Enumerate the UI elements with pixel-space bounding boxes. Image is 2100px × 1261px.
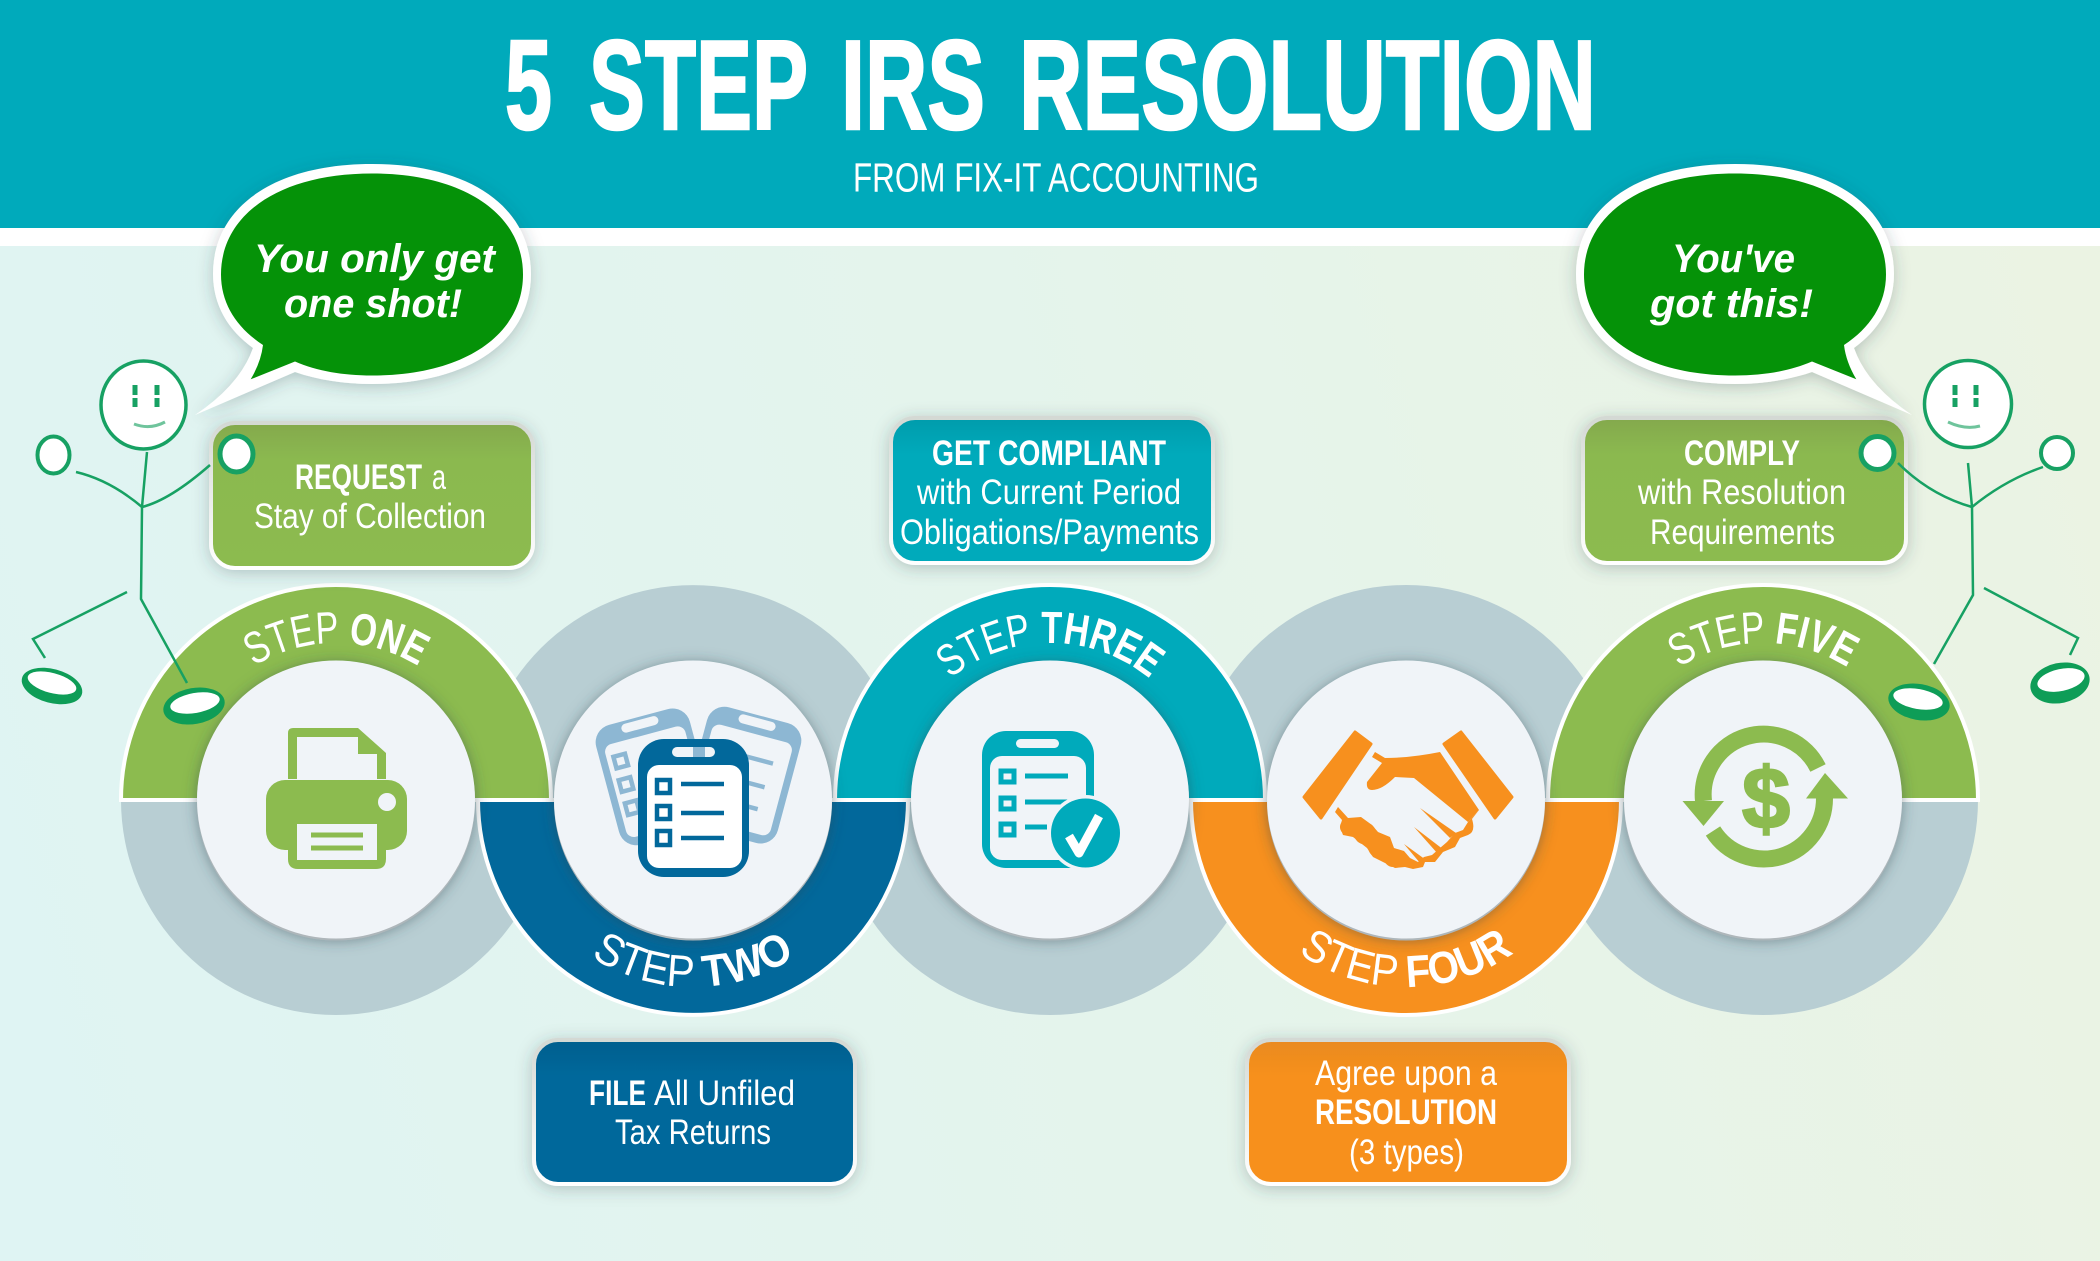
icon: clipboard with check [982, 731, 1124, 871]
text: file all unfiled tax returns [589, 1074, 795, 1152]
stick figure: left [18, 361, 253, 729]
text: comply with resolution requirements: with Resolution [1637, 473, 1846, 512]
bubble text: You only get [254, 237, 497, 281]
ring: step five [1548, 585, 1978, 800]
text: file all unfiled tax returns: Tax Returns [615, 1113, 771, 1152]
text: request a stay of collection: REQUEST [295, 458, 422, 497]
centre discs [197, 660, 1902, 940]
text: agree upon a resolution: RESOLUTION [1315, 1093, 1497, 1132]
text: agree upon a resolution: (3 types) [1349, 1133, 1464, 1172]
text: comply with resolution requirements: COMPLY [1684, 434, 1800, 473]
title: 5 [505, 14, 552, 156]
title: RESOLUTION [1019, 14, 1596, 156]
text: get compliant: GET COMPLIANT [932, 434, 1166, 473]
speech bubble: right [1576, 164, 1912, 415]
icon: clipboards [592, 703, 805, 877]
label: step four: STEP FOUR [1302, 931, 1514, 988]
ring: step three [835, 585, 1265, 800]
back clipboard left [592, 704, 717, 849]
panel: step one box [211, 423, 533, 568]
text: file all unfiled tax returns: FILE [589, 1074, 646, 1113]
label: step one: STEP ONE [244, 612, 431, 666]
ring: step one [121, 585, 551, 800]
text: agree upon a resolution: Agree upon a [1315, 1054, 1497, 1093]
bubble text: You've [1672, 237, 1795, 281]
back clipboard right [680, 703, 805, 848]
bubble text: got this! [1649, 282, 1813, 326]
text: get compliant: Obligations/Payments [900, 513, 1199, 552]
text: get compliant [900, 434, 1199, 552]
text: agree upon a resolution [1315, 1054, 1497, 1172]
icon: dollar refresh: $ [1742, 751, 1790, 847]
text: request a stay of collection: Stay of Collection [254, 497, 486, 536]
panel: step four box [1247, 1040, 1569, 1184]
title [505, 14, 1596, 156]
title: IRS [841, 14, 985, 156]
header band [0, 0, 2100, 246]
text: request a stay of collection: a [432, 458, 446, 497]
panel: step five box [1583, 418, 1906, 563]
ring: step four [1191, 800, 1621, 1015]
icon: printer [266, 728, 407, 869]
bubble text [1649, 237, 1813, 326]
bubble text [254, 237, 497, 326]
label: step two: STEP TWO [595, 934, 789, 986]
title: STEP [589, 14, 808, 156]
text: get compliant: with Current Period [916, 473, 1181, 512]
panel: step two box [534, 1040, 855, 1184]
ring: step two [478, 800, 908, 1015]
stick figure: right [1861, 360, 2094, 725]
text: request a stay of collection [254, 458, 486, 536]
speech bubble: left [195, 164, 531, 415]
icon: dollar refresh [1682, 734, 1848, 859]
front clipboard [638, 739, 749, 877]
panel: step three box [891, 418, 1213, 563]
icon: handshake [1304, 732, 1512, 869]
text: comply with resolution requirements: Requirements [1650, 513, 1835, 552]
label: step five: STEP FIVE [1668, 612, 1860, 666]
bubble text: one shot! [284, 282, 462, 326]
text: file all unfiled tax returns: All Unfiled [654, 1074, 795, 1113]
grey half rings [121, 585, 1978, 1015]
subtitle: FROM FIX-IT ACCOUNTING [853, 154, 1259, 200]
label: step three: STEP THREE [937, 612, 1166, 678]
text: comply with resolution requirements [1637, 434, 1846, 552]
